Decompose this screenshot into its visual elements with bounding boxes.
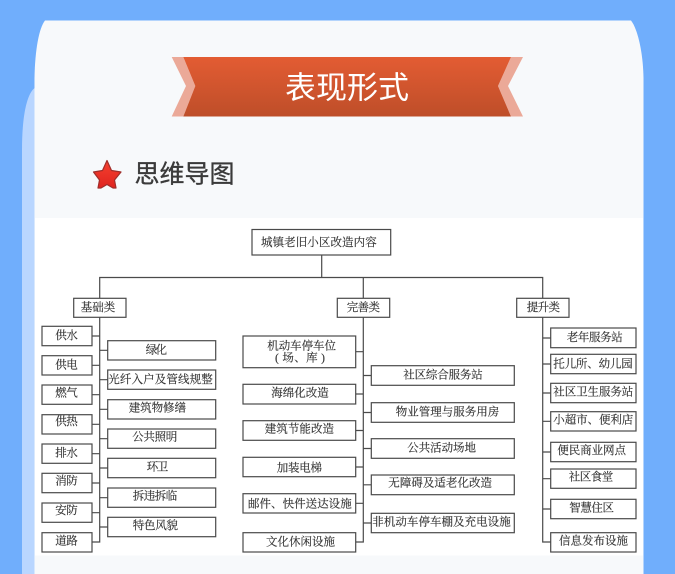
item: 供水: 供水	[55, 328, 78, 342]
item: 物业管理与服务用房: 物业管理与服务用房	[396, 405, 499, 419]
item: 道路	[42, 533, 92, 552]
item: 社区卫生服务站	[551, 383, 636, 403]
item: 光纤入户及管线规整: 光纤入户及管线规整	[108, 372, 213, 386]
item: 老年服务站	[551, 328, 636, 348]
category: 完善类	[337, 298, 390, 317]
item: 消防: 消防	[55, 474, 78, 488]
item: 加装电梯: 加装电梯	[277, 460, 322, 474]
category: 基础类: 基础类	[81, 300, 116, 314]
item: 建筑节能改造: 建筑节能改造	[265, 421, 334, 435]
item: 老年服务站: 老年服务站	[567, 330, 623, 344]
item: 拆违拆临: 拆违拆临	[133, 489, 178, 503]
item: 供电	[42, 356, 92, 375]
root node: 城镇老旧小区改造内容	[261, 235, 377, 249]
item: 海绵化改造: 海绵化改造	[271, 385, 329, 399]
item: 便民商业网点	[551, 442, 636, 462]
item: 公共照明: 公共照明	[132, 430, 177, 444]
item: 道路: 道路	[55, 535, 78, 548]
item: 托儿所、幼儿园: 托儿所、幼儿园	[553, 356, 633, 370]
item: 环卫: 环卫	[147, 461, 169, 474]
item: 海绵化改造	[243, 384, 356, 404]
item: 非机动车停车棚及充电设施	[371, 513, 514, 533]
item: 光纤入户及管线规整	[108, 370, 216, 389]
item: 便民商业网点: 便民商业网点	[557, 443, 626, 457]
connector lines	[92, 255, 551, 542]
item: 供热: 供热	[55, 414, 78, 428]
item: 物业管理与服务用房	[371, 403, 514, 422]
item: 公共活动场地	[371, 439, 514, 458]
item: 文化休闲设施: 文化休闲设施	[266, 535, 336, 549]
item: 邮件、快件送达设施: 邮件、快件送达设施	[248, 496, 352, 510]
item: 环卫	[108, 458, 216, 478]
item: 公共活动场地: 公共活动场地	[407, 440, 476, 454]
item: 小超市、便利店	[551, 412, 636, 431]
item: 燃气	[42, 385, 92, 404]
category: 完善类: 完善类	[347, 300, 380, 314]
item: 文化休闲设施	[243, 533, 356, 552]
item: 安防: 安防	[55, 503, 78, 517]
item: 信息发布设施: 信息发布设施	[559, 534, 628, 548]
item: 非机动车停车棚及充电设施: 非机动车停车棚及充电设施	[372, 515, 511, 529]
item: 排水	[42, 444, 92, 463]
item: 加装电梯	[243, 457, 356, 477]
icon: red star	[94, 160, 121, 188]
item: 社区食堂	[551, 469, 636, 488]
background card behind	[22, 87, 60, 574]
item: 邮件、快件送达设施	[243, 494, 356, 513]
diagram panel	[35, 218, 643, 556]
item: 无障碍及适老化改造	[371, 475, 514, 495]
item: 供水	[42, 326, 92, 346]
item: 托儿所、幼儿园	[551, 354, 636, 374]
item: 特色风貌: 特色风貌	[133, 518, 178, 532]
item: 消防	[42, 473, 92, 493]
item: 社区食堂: 社区食堂	[569, 470, 614, 484]
item: 建筑物修缮	[108, 400, 216, 419]
item: 公共照明	[108, 429, 216, 448]
org chart	[42, 230, 636, 552]
item: 信息发布设施	[551, 533, 636, 552]
category: 提升类: 提升类	[527, 300, 560, 314]
item: 特色风貌	[108, 517, 216, 537]
item: 智慧住区: 智慧住区	[569, 500, 614, 514]
item: 供电: 供电	[55, 357, 78, 371]
item: 燃气: 燃气	[55, 385, 78, 399]
item: 社区综合服务站	[371, 366, 514, 385]
section heading: 思维导图	[134, 160, 235, 188]
item: 安防	[42, 503, 92, 522]
category: 提升类	[517, 298, 569, 317]
item: 排水: 排水	[55, 445, 78, 459]
category: 基础类	[74, 298, 126, 317]
title ribbon: 表现形式	[285, 70, 409, 106]
item: 机动车停车位（场、库）	[243, 336, 356, 368]
item: 建筑物修缮: 建筑物修缮	[129, 400, 186, 414]
item: 社区综合服务站: 社区综合服务站	[403, 368, 483, 382]
root node	[252, 230, 391, 255]
item: 供热	[42, 414, 92, 434]
item: 建筑节能改造	[243, 421, 356, 440]
item: 机动车停车位（场、库）: ( 场、库 )	[275, 350, 325, 364]
item: 机动车停车位（场、库）: 机动车停车位	[267, 339, 336, 353]
item: 智慧住区	[551, 499, 636, 519]
item: 无障碍及适老化改造: 无障碍及适老化改造	[388, 475, 492, 489]
title ribbon	[172, 57, 523, 116]
item: 拆违拆临	[108, 488, 216, 507]
item: 绿化	[108, 341, 216, 360]
item: 小超市、便利店: 小超市、便利店	[553, 413, 634, 427]
item: 绿化: 绿化	[146, 342, 168, 356]
item: 社区卫生服务站: 社区卫生服务站	[553, 384, 633, 398]
